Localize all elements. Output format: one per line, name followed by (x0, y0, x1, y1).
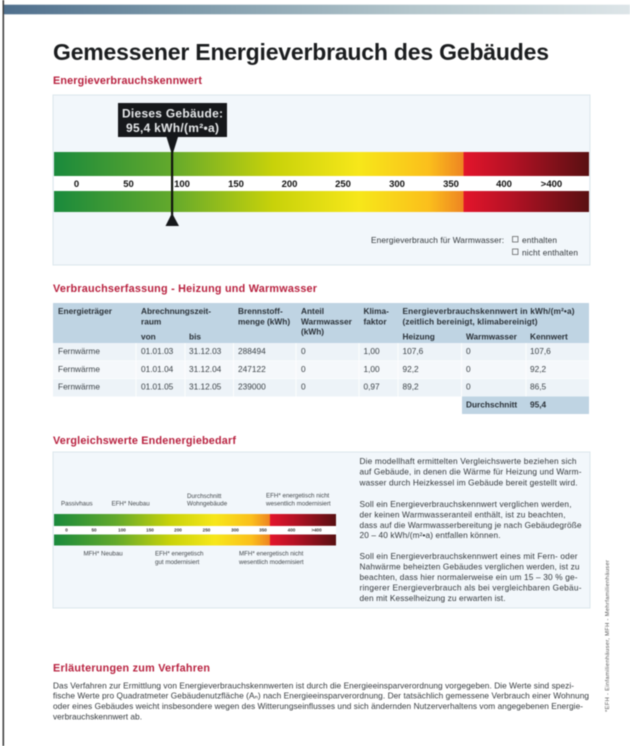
labels below the scale: MFH* Neubau (84, 550, 123, 558)
table row 2005: 239000 (238, 382, 266, 392)
heading: Vergleichswerte: Vergleichswerte Endenergiebedarf (53, 435, 236, 447)
table header: Anteil (301, 306, 324, 316)
table row 2005: 89,2 (402, 382, 419, 392)
table row 2005: 86,5 (530, 382, 547, 392)
comparison explanation text: ringerer Energieverbrauch als bei vergleichbaren Gebäu- (360, 583, 582, 593)
table row 2004 (53, 361, 589, 378)
comparison scale: 50 (91, 528, 97, 532)
comparison scale: 250 (203, 528, 211, 532)
table row 2004: 1,00 (364, 364, 380, 374)
comparison explanation text (358, 456, 582, 603)
upper colour bar (54, 152, 589, 176)
table row 2003: Fernwärme (58, 346, 100, 356)
comparison scale: 300 (231, 528, 239, 532)
legend: hot water: Energieverbrauch für Warmwasser: (371, 235, 504, 245)
labels above the scale (61, 492, 331, 508)
comparison explanation text: wasser durch Heizkessel im Gebäude bereit gestellt wird. (358, 477, 578, 487)
scale labels strip (54, 176, 589, 191)
table row 2005 (53, 379, 589, 396)
table row 2005: 01.01.05 (141, 382, 174, 392)
table header: faktor (364, 316, 387, 326)
labels above the scale: Passivhaus (61, 500, 93, 508)
comparison scale (54, 514, 336, 546)
average row: Durchschnitt (466, 400, 517, 410)
comparison scale: 100 (118, 528, 126, 532)
legend: hot water: enthalten (522, 235, 557, 245)
table row 2003: 288494 (238, 346, 266, 356)
comparison scale: 200 (174, 528, 182, 532)
table header: Abrechnungszeit- (141, 306, 211, 316)
top gradient bar (4, 5, 630, 14)
labels below the scale (84, 550, 304, 566)
table row 2003: 0 (301, 346, 306, 356)
panel: energy scale (53, 95, 590, 265)
table row 2005: 0,97 (364, 382, 380, 392)
scale labels strip: 100 (174, 179, 190, 190)
table row 2004: 92,2 (402, 364, 419, 374)
comparison scale: 350 (259, 528, 267, 532)
table row 2005: 0 (466, 382, 471, 392)
table header: Warmwasser (466, 332, 518, 342)
title: Gemessener Energieverbrauch des Gebäudes (53, 39, 549, 65)
marker: this building: Dieses Gebäude: (122, 106, 223, 120)
table row 2003: 01.01.03 (141, 346, 174, 356)
comparison explanation text: Soll ein Energieverbrauchskennwert verglichen werden, (360, 499, 572, 509)
labels below the scale: EFH* energetisch (155, 550, 204, 558)
table row 2003: 1,00 (364, 346, 380, 356)
panel: comparison values (53, 452, 590, 608)
table header: bis (189, 332, 201, 342)
marker: this building (118, 103, 227, 226)
explanation text (53, 680, 589, 721)
explanation text: oder eines Gebäudes weicht insbesondere wegen des Witterungseinflusses und sich ändernden Nutzerverhaltens vom angegebenen Energie- (53, 701, 583, 711)
table: consumption (53, 303, 589, 414)
comparison explanation text: beachten, dass hier normalerweise ein um 15 – 30 % ge- (360, 572, 578, 582)
comparison explanation text: den mit Kesselheizung zu erwarten ist. (360, 593, 506, 603)
table header: menge (kWh) (238, 316, 290, 326)
labels above the scale: EFH* Neubau (112, 500, 150, 508)
comparison explanation text: auf Gebäude, in denen die Wärme für Heizung und Warm- (360, 467, 582, 477)
table header: Kennwert (530, 332, 568, 342)
table row 2005: Fernwärme (58, 382, 100, 392)
table header: von (141, 332, 156, 342)
heading: Erläuterungen: Erläuterungen zum Verfahren (53, 662, 210, 674)
scale labels strip: 150 (228, 179, 244, 190)
table header: (kWh) (301, 326, 324, 336)
column separators (136, 343, 526, 396)
table row 2004: Fernwärme (58, 364, 100, 374)
scale labels strip: 400 (496, 179, 512, 190)
average row (462, 396, 589, 414)
table header: Warmwasser (301, 316, 353, 326)
table header: Energieträger (58, 306, 113, 316)
comparison explanation text: dass auf die Warmwasserbereitung je nach Gebäudegröße (360, 520, 582, 530)
table header (53, 303, 589, 343)
table row 2005: 0 (301, 382, 306, 392)
scale labels strip: 50 (123, 179, 134, 190)
table header: Brennstoff- (238, 306, 283, 316)
scale labels strip: 250 (335, 179, 351, 190)
scale labels strip: >400 (541, 179, 562, 190)
labels above the scale: Durchschnitt (187, 493, 222, 500)
comparison explanation text: der keinen Warmwasseranteil enthält, ist zu beachten, (360, 509, 566, 519)
table header: Klima- (364, 306, 389, 316)
table row 2003 (53, 343, 589, 360)
heading: Energieverbrauchskennwert: Energieverbrauchskennwert (53, 75, 202, 87)
table row 2004: 01.01.04 (141, 364, 174, 374)
table row 2004: 247122 (238, 364, 266, 374)
explanation text: Das Verfahren zur Ermittlung von Energieverbrauchskennwerten ist durch die Energieeinsparverordnung vorgegeben. Die Werte sind spezi- (53, 680, 574, 690)
page edge line (2, 0, 4, 746)
labels above the scale: Wohngebäude (187, 500, 228, 508)
marker: this building: 95,4 kWh/(m²•a) (126, 121, 219, 135)
table header: Heizung (402, 332, 435, 342)
table row 2003: 31.12.03 (189, 346, 222, 356)
comparison explanation text: Nahwärme beheizten Gebäudes verglichen werden, ist zu (360, 562, 580, 572)
legend: hot water (371, 235, 578, 258)
average row: 95,4 (530, 400, 547, 410)
scale labels strip: 350 (443, 179, 459, 190)
table row 2004: 31.12.04 (189, 364, 222, 374)
table header: (zeitlich bereinigt, klimabereinigt) (402, 316, 538, 326)
table row 2005: 31.12.05 (189, 382, 222, 392)
labels above the scale: wesentlich modernisiert (265, 500, 331, 508)
explanation text: fische Werte pro Quadratmeter Gebäudenutzfläche (Aₙ) nach Energieeinsparverordnung. Der tatsächlich gemessene Verbrauch einer Wohnung (53, 691, 589, 701)
labels above the scale: EFH* energetisch nicht (266, 492, 330, 500)
comparison scale: 150 (146, 528, 154, 532)
table header: raum (141, 316, 161, 326)
labels below the scale: MFH* energetisch nicht (239, 550, 304, 558)
table header: Energieverbrauchskennwert in kWh/(m²•a) (402, 306, 575, 316)
comparison explanation text: 20 – 40 kWh/(m²•a) entfallen können. (360, 530, 500, 540)
labels below the scale: wesentlich modernisiert (238, 559, 304, 566)
comparison explanation text: Die modellhaft ermittelten Vergleichswerte beziehen sich (360, 456, 577, 466)
comparison explanation text: Soll ein Energieverbrauchskennwert eines mit Fern- oder (360, 551, 578, 561)
comparison scale: 0 (65, 528, 68, 532)
explanation text: verbrauchskennwert ab. (53, 711, 142, 721)
scale labels strip: 200 (282, 179, 297, 190)
scale labels strip: 0 (74, 179, 79, 190)
legend: hot water: nicht enthalten (522, 248, 578, 258)
comparison scale: 400 (288, 528, 296, 532)
footnote, vertical: *EFH - Einfamilienhäuser, MFH - Mehrfamilienhäuser (605, 560, 611, 712)
table row 2003: 0 (466, 346, 471, 356)
heading: Verbrauchserfassung: Verbrauchserfassung - Heizung und Warmwasser (53, 283, 318, 295)
labels below the scale: gut modernisiert (155, 559, 200, 566)
table row 2004: 0 (301, 364, 306, 374)
table row 2004: 0 (466, 364, 471, 374)
comparison scale: >400 (311, 528, 322, 532)
lower colour bar (54, 191, 589, 212)
table row 2004: 92,2 (530, 364, 547, 374)
table row 2003: 107,6 (402, 346, 424, 356)
scale labels strip: 300 (389, 179, 405, 190)
table row 2003: 107,6 (530, 346, 551, 356)
